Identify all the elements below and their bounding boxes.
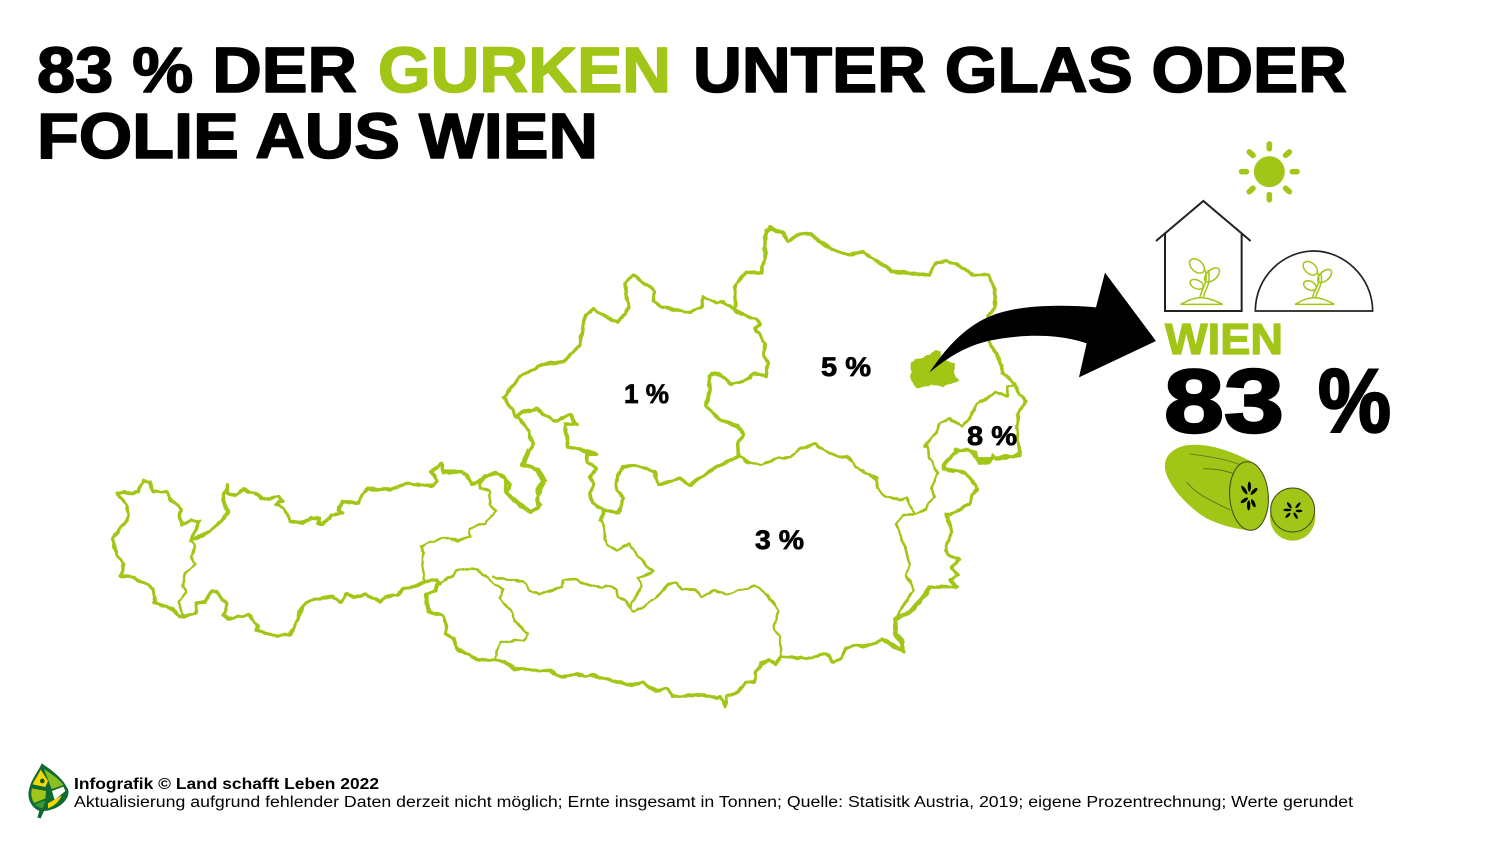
label: Niederösterreich 5 %: 5 % bbox=[821, 352, 871, 382]
cucumber body bbox=[1165, 445, 1271, 532]
icon: glass greenhouse bbox=[1156, 201, 1251, 311]
title: UNTER GLAS ODER bbox=[693, 34, 1347, 106]
title: 83 % DER bbox=[37, 34, 357, 106]
map: Wien highlighted bbox=[911, 349, 959, 387]
label: Steiermark 3 %: 3 % bbox=[755, 525, 804, 555]
map: west Vorarlberg and Tirol bbox=[113, 450, 544, 635]
icon: seedling in tunnel bbox=[1295, 259, 1334, 304]
label: Burgenland 8 %: 8 % bbox=[967, 421, 1017, 451]
label: Salzburg / Oberösterreich 1 %: 1 % bbox=[624, 379, 669, 409]
title: FOLIE AUS WIEN bbox=[37, 100, 598, 172]
map: south Osttirol and Kärnten bbox=[426, 512, 930, 707]
callout number: 83 %: 83 bbox=[1164, 352, 1284, 452]
map: Salzburg and Oberösterreich bbox=[490, 228, 787, 520]
map: Niederösterreich and Burgenland north bbox=[720, 227, 1026, 478]
footer credit: Infografik © Land schafft Leben 2022 bbox=[74, 776, 379, 793]
callout number: 83 % bbox=[1164, 352, 1391, 452]
icon: cucumber bbox=[1165, 445, 1315, 541]
logo: Land schafft Leben leaf bbox=[28, 763, 68, 818]
cucumber slice bbox=[1270, 488, 1315, 541]
callout number: 83 %: % bbox=[1318, 352, 1391, 452]
icon: seedling in greenhouse bbox=[1181, 256, 1223, 304]
map outlines bbox=[113, 227, 1026, 707]
callout label: WIEN: WIEN bbox=[1165, 315, 1283, 364]
title bbox=[37, 34, 1347, 172]
map of Austria bbox=[113, 227, 1026, 707]
map: Steiermark east and Burgenland south bbox=[870, 445, 1019, 651]
footer source note: Aktualisierung aufgrund fehlender Daten derzeit nicht möglich; Ernte insgesamt in Tonnen; Quelle: Statisitk Austria, 2019; eigene Prozentrechnung; Werte gerundet bbox=[74, 794, 1354, 811]
title: GURKEN bbox=[378, 34, 671, 106]
arrow from Wien to callout bbox=[929, 273, 1156, 377]
icon: sun bbox=[1242, 144, 1297, 200]
icon: foil tunnel bbox=[1255, 251, 1373, 311]
